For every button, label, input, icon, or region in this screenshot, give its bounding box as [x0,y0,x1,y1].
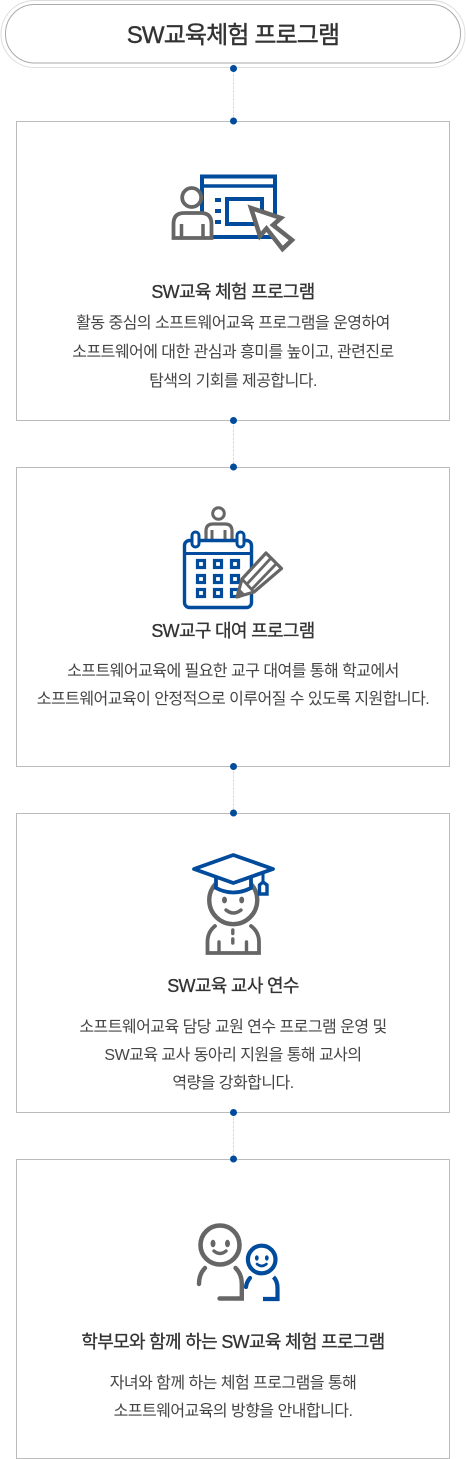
text: SW education experience description: 활동 중심의 소프트웨어교육 프로그램을 운영하여 [76,315,390,332]
heading: parent and child program: 학부모와 함께 하는 SW교육 체험 프로그램 [81,1332,385,1352]
connector: panel 3 to panel 4 [230,1109,237,1162]
text: SW teacher training description: SW교육 교사 동아리 지원을 통해 교사의 [104,1047,362,1064]
text: SW equipment rental description [37,662,429,708]
icon: calendar with person and pencil [184,508,282,608]
text: SW equipment rental description: 소프트웨어교육이 안정적으로 이루어질 수 있도록 지원합니다. [37,691,429,708]
text: SW equipment rental description: 소프트웨어교육에 필요한 교구 대여를 통해 학교에서 [67,663,399,680]
text: SW education experience description: 소프트웨어에 대한 관심과 흥미를 높이고, 관련진로 [72,344,394,361]
icon: person with browser window and cursor [174,176,292,249]
heading: SW teacher training: SW교육 교사 연수 [167,976,299,996]
text: SW education experience description [72,314,394,390]
icon: graduate with cap [194,855,273,953]
heading: SW education experience: SW교육 체험 프로그램 [151,282,315,302]
panel: SW equipment rental [16,467,450,767]
panel: SW education experience [16,121,450,421]
connector: panel 2 to panel 3 [230,763,237,816]
title: SW교육체험 프로그램 [127,22,339,49]
text: SW education experience description: 탐색의 기회를 제공합니다. [149,373,317,390]
text: parent and child description: 자녀와 함께 하는 체험 프로그램을 통해 [110,1375,356,1392]
panel: SW teacher training [16,813,450,1113]
heading: SW equipment rental: SW교구 대여 프로그램 [151,621,315,641]
panel: parent and child program [16,1159,450,1459]
text: parent and child description [110,1374,356,1420]
text: SW teacher training description: 소프트웨어교육 담당 교원 연수 프로그램 운영 및 [79,1019,387,1036]
title pill [1,0,465,68]
icon: parent and child [199,1226,278,1299]
connector: panel 1 to panel 2 [230,417,237,470]
connector: title to panel 1 [230,65,237,124]
text: parent and child description: 소프트웨어교육의 방향을 안내합니다. [114,1403,352,1420]
text: SW teacher training description [79,1018,387,1092]
text: SW teacher training description: 역량을 강화합니다. [172,1075,294,1092]
